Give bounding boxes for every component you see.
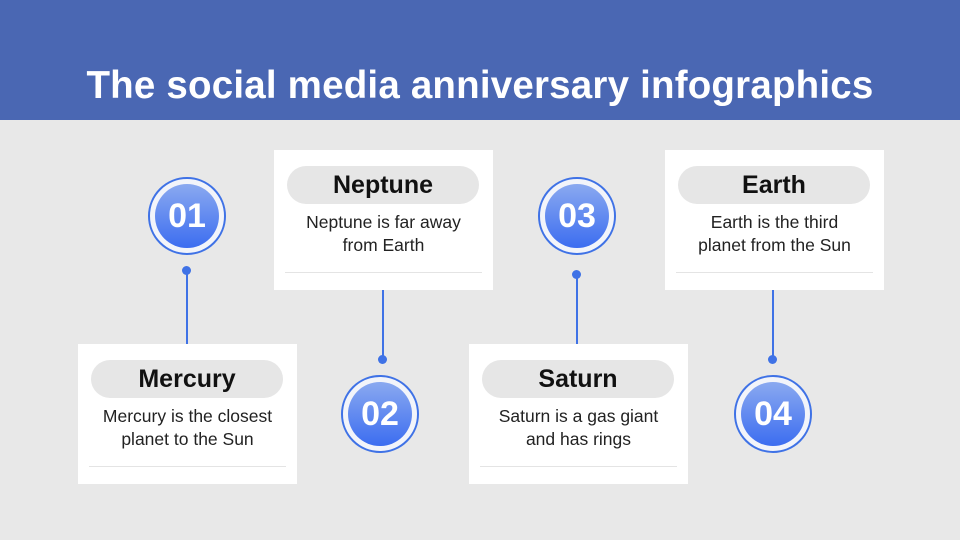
card: Mercury [78,344,297,484]
card: Neptune [274,150,493,290]
circle 01: 01 [168,197,206,235]
card: Mercury: Mercury [138,365,236,393]
connector 04 [768,290,777,364]
card: Earth: Earth is the third [711,212,838,232]
card: Earth: Earth [742,171,806,199]
connector 03 [572,270,581,344]
circle 04: 04 [754,395,792,433]
card: Saturn [469,344,688,484]
circle 03 [538,177,616,255]
card: Saturn: and has rings [526,429,631,449]
circle 02: 02 [361,395,399,433]
connector 02 [378,290,387,364]
circle 04 [734,375,812,453]
card: Mercury: planet to the Sun [121,429,254,449]
card: Neptune: Neptune is far away [306,212,461,232]
circle 03: 03 [558,197,596,235]
circle 02 [341,375,419,453]
card: Saturn: Saturn is a gas giant [499,406,658,426]
title: The social media anniversary infographics [86,64,874,107]
card: Neptune: Neptune [333,171,433,199]
card: Saturn: Saturn [538,365,618,393]
card: Mercury: Mercury is the closest [103,406,272,426]
card: Neptune: from Earth [343,235,424,255]
card: Earth: planet from the Sun [698,235,851,255]
card: Earth [665,150,884,290]
header band [0,0,960,120]
circle 01 [148,177,226,255]
connector 01 [182,266,191,344]
